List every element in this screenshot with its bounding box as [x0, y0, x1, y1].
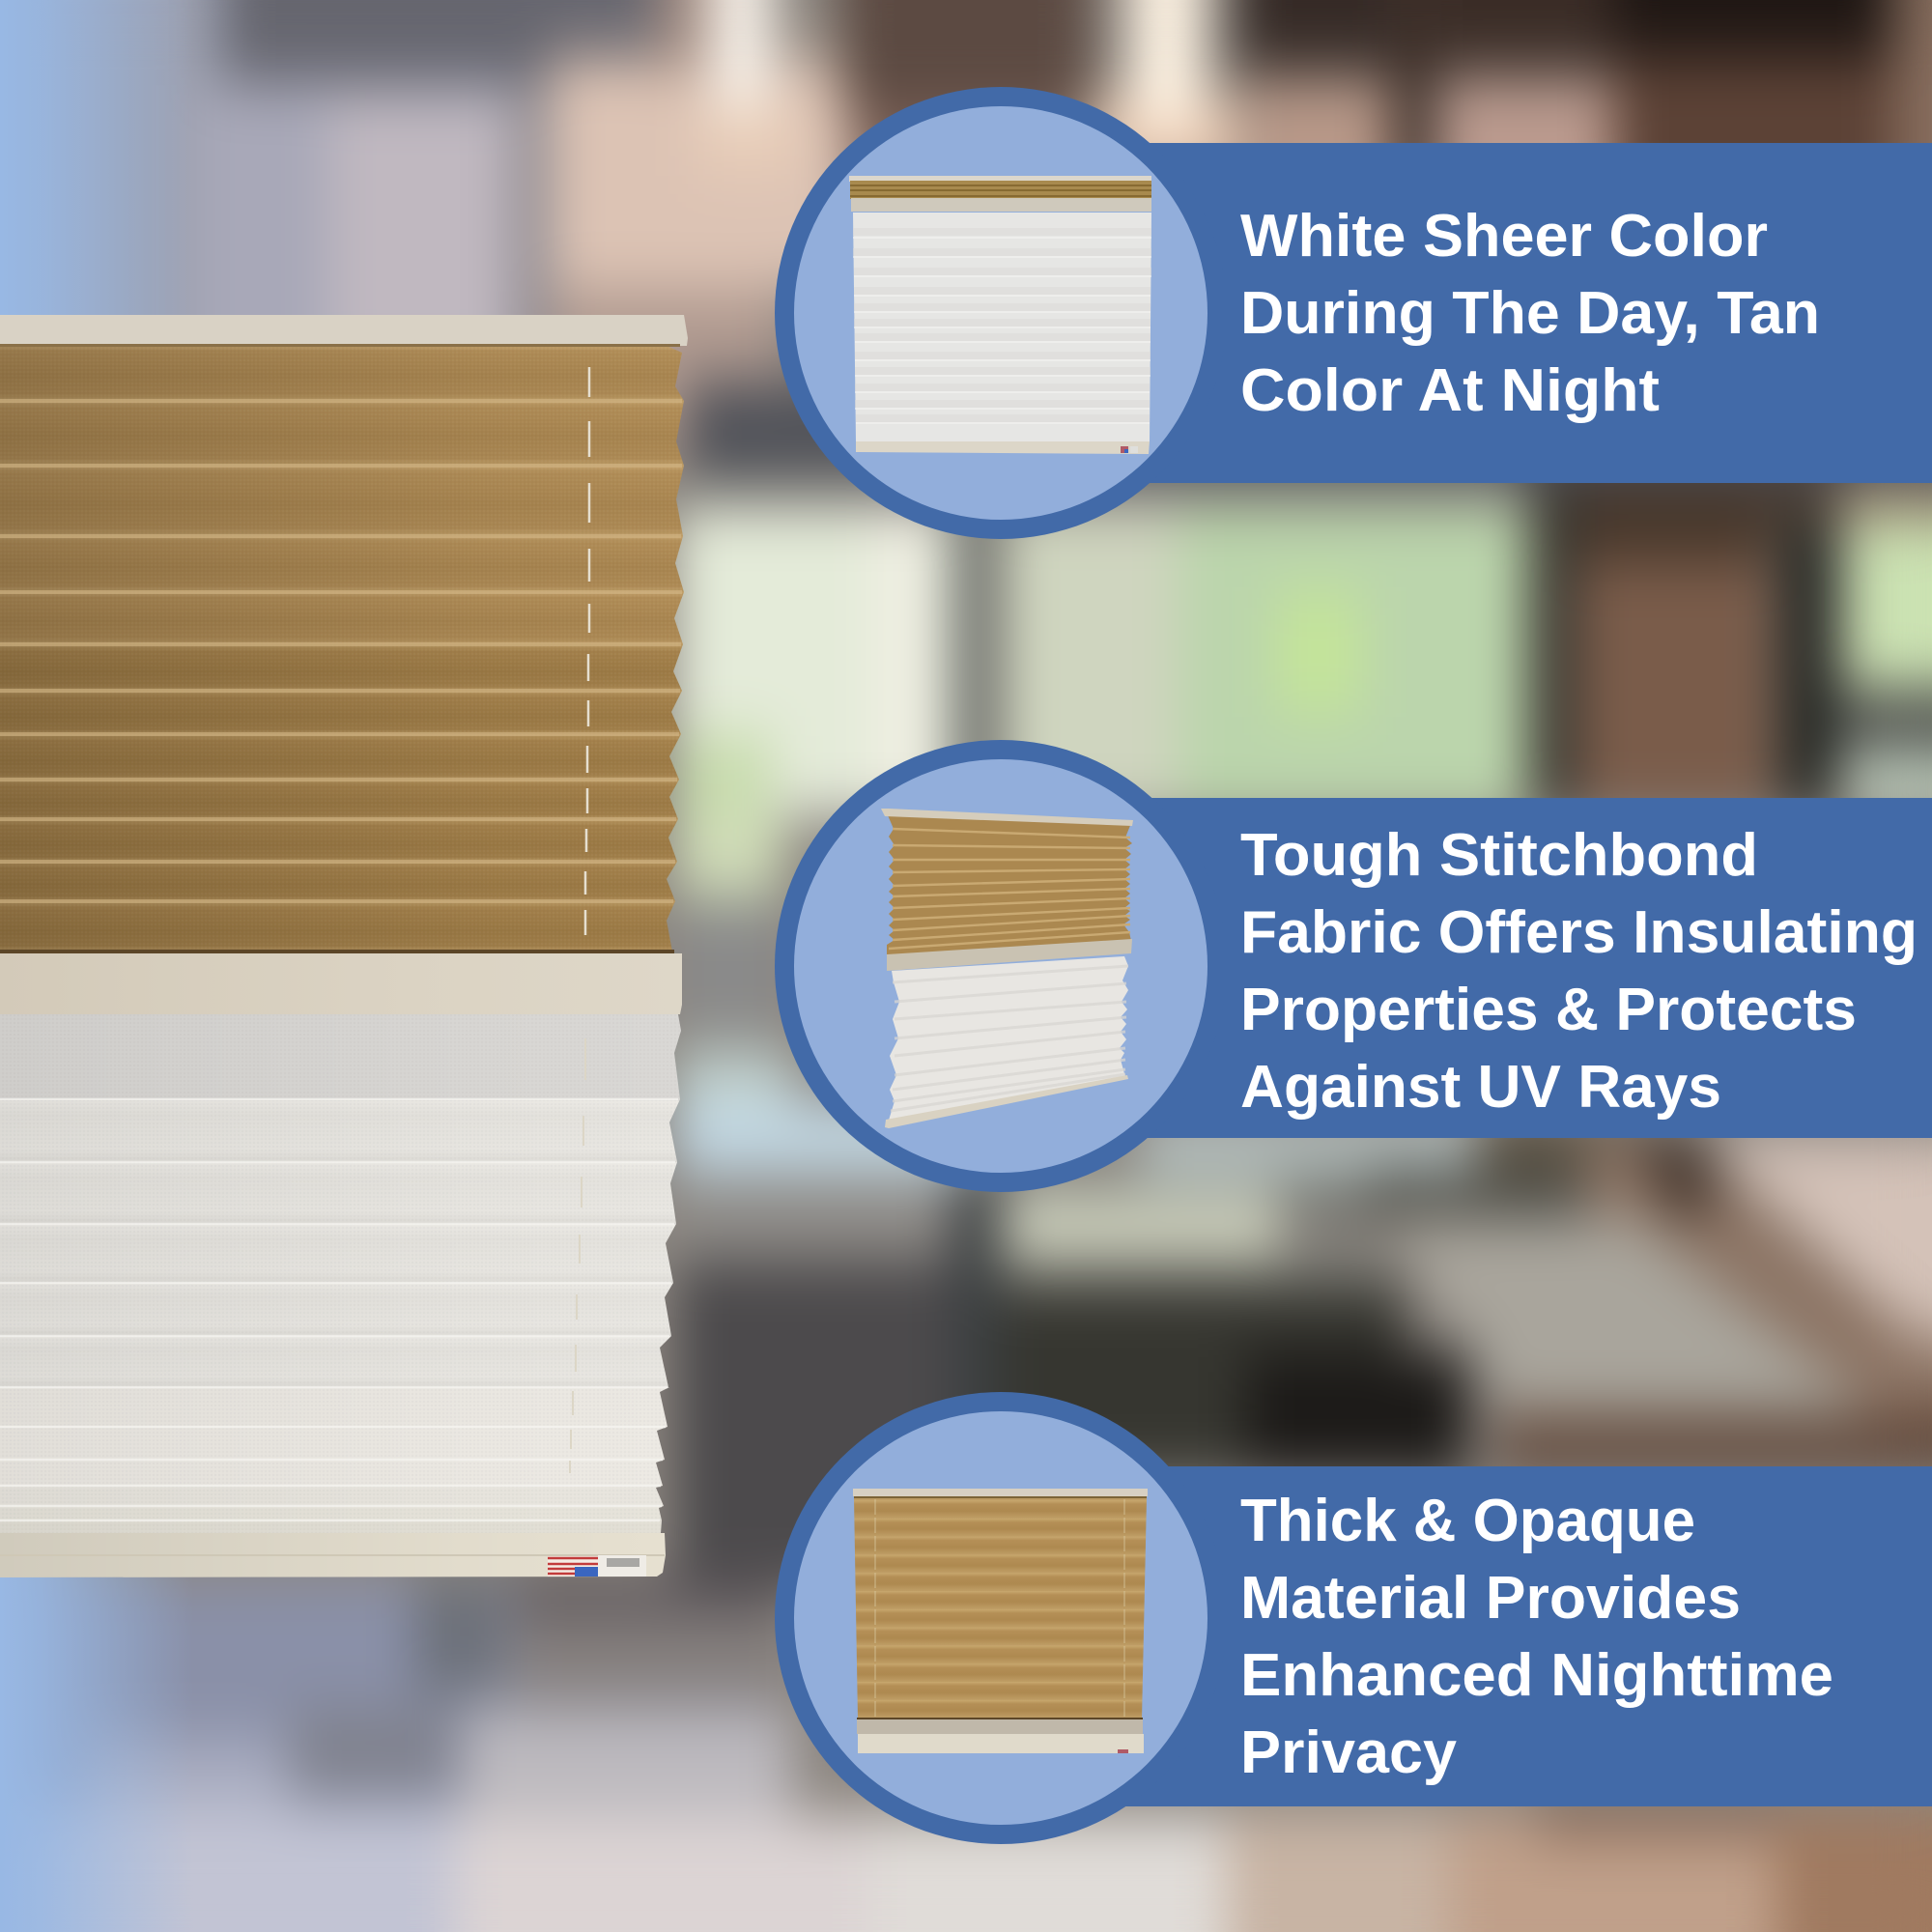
thumbnail: shade raised, tan fabric showing [853, 1489, 1148, 1753]
circle badge [775, 740, 1227, 1192]
US flag sticker [548, 1555, 646, 1577]
text: feature 2 [1240, 822, 1918, 1121]
text: feature 1 [1240, 203, 1820, 424]
text: feature 3: Material Provides [1240, 1565, 1741, 1632]
text: feature 3: Enhanced Nighttime [1240, 1642, 1833, 1709]
text: feature 1: Color At Night [1240, 357, 1660, 424]
text: feature 3 [1240, 1488, 1833, 1786]
tan night-side fabric [0, 346, 686, 952]
text: feature 2: Against UV Rays [1240, 1054, 1721, 1121]
thumbnail: shade lowered, white sheer showing [849, 176, 1151, 454]
text: feature 2: Properties & Protects [1240, 977, 1857, 1043]
text: feature 2: Fabric Offers Insulating [1240, 899, 1918, 966]
panel: opaque privacy feature [775, 1392, 1932, 1844]
banner [1001, 1466, 1932, 1806]
text: feature 1: White Sheer Color [1240, 203, 1768, 270]
circle badge [775, 1392, 1227, 1844]
large shade product photo [0, 315, 688, 1577]
text: feature 1: During The Day, Tan [1240, 280, 1820, 347]
text: feature 3: Thick & Opaque [1240, 1488, 1695, 1554]
panel: white sheer feature [775, 87, 1932, 539]
middle rail [0, 953, 682, 1014]
panel: stitchbond fabric feature [775, 740, 1932, 1192]
banner [1001, 143, 1932, 483]
bottom rail [0, 1533, 666, 1577]
top rail [0, 315, 688, 346]
lift cord threads [585, 367, 589, 935]
thumbnail: angled view of half tan half white shade [881, 809, 1133, 1128]
text: feature 2: Tough Stitchbond [1240, 822, 1758, 889]
text: feature 3: Privacy [1240, 1719, 1458, 1786]
white day-side fabric [0, 1014, 686, 1533]
circle badge [775, 87, 1227, 539]
banner [1001, 798, 1932, 1138]
